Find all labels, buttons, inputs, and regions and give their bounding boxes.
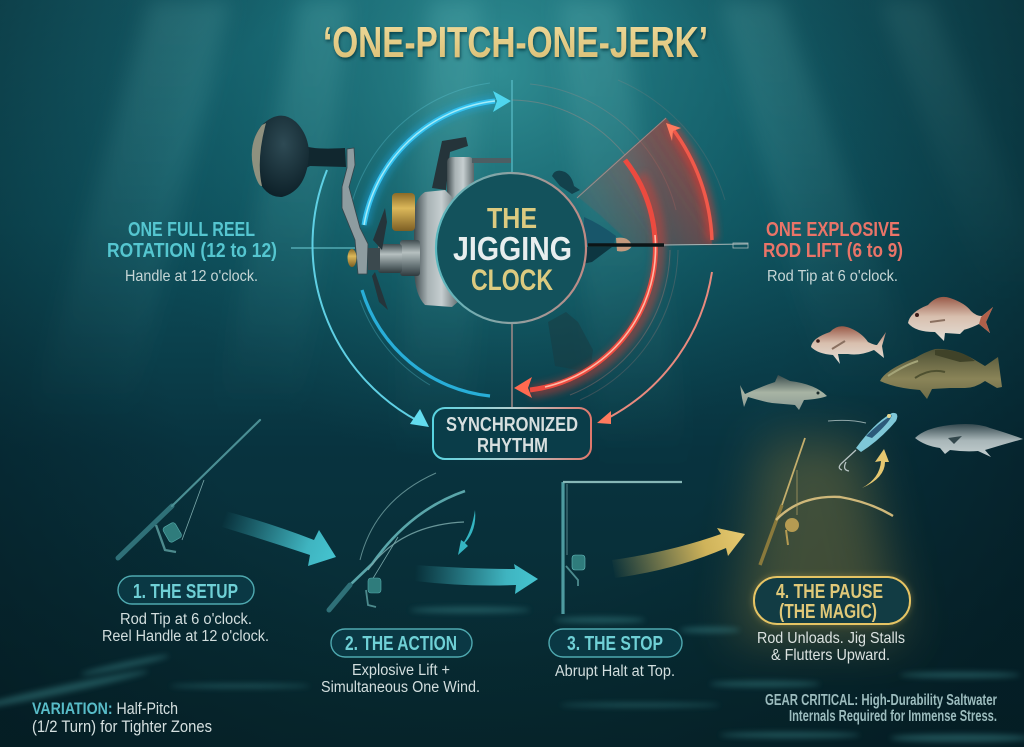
step 4 pill: 4. THE PAUSE: [776, 581, 883, 603]
step 1 description: [102, 611, 269, 645]
clock axis lines: [291, 80, 512, 408]
crank handle arm: [342, 148, 368, 274]
red sweep wedge: [577, 118, 712, 245]
step 4 description: Rod Unloads. Jig Stalls: [757, 630, 905, 647]
step 3 rod: [563, 482, 682, 614]
right label: rod lift: ROD LIFT (6 to 9): [763, 240, 903, 262]
teal arrow 1: [222, 511, 336, 566]
inner red arc with arrow: [514, 160, 660, 398]
fish: snapper 1: [811, 326, 886, 364]
step 2 pill: [331, 629, 472, 657]
step 3 pill: 3. THE STOP: [567, 633, 663, 655]
outer red arc with arrows: [597, 123, 712, 424]
step 4 description: [757, 630, 905, 664]
star drag fins: [372, 208, 388, 310]
fish: grouper: [880, 349, 1002, 399]
step 2 description: Simultaneous One Wind.: [321, 679, 480, 696]
gold flutter arrow: [862, 449, 889, 488]
knob cap: [252, 123, 266, 186]
clock label: THE: [487, 203, 537, 235]
brass nut: [392, 193, 415, 231]
right label: rod lift: [763, 219, 903, 285]
step 2 description: [321, 662, 480, 696]
step 4 pill: (THE MAGIC): [779, 601, 877, 623]
left label: reel rotation: ROTATION (12 to 12): [107, 240, 277, 262]
step 4 rod: [760, 438, 893, 565]
faint concentric rings: [350, 80, 725, 400]
angler rod: [588, 243, 748, 248]
variation note: (1/2 Turn) for Tighter Zones: [32, 717, 212, 736]
step 2 pill: 2. THE ACTION: [345, 633, 457, 655]
reel spindle: [368, 240, 420, 276]
small brass cap: [348, 249, 356, 267]
left label: reel rotation: Handle at 12 o'clock.: [125, 268, 258, 285]
jig lure: [828, 413, 897, 471]
variation note: [32, 699, 212, 736]
step 1 pill: 1. THE SETUP: [133, 581, 238, 603]
step 2 rod: [329, 473, 465, 610]
angler figure behind the clock: [548, 171, 632, 372]
outer blue arc with arrow: [313, 170, 429, 427]
step 4 pill: [754, 577, 910, 624]
reel illustration: [252, 116, 511, 310]
reel side plate: [414, 190, 460, 307]
knob neck: [298, 145, 346, 172]
fish school: [740, 297, 1023, 488]
inner blue arc with arrow: [362, 91, 511, 396]
synchronized rhythm box: RHYTHM: [477, 435, 548, 457]
clock label: JIGGING: [453, 230, 572, 267]
step 1 pill: [118, 576, 254, 604]
clock center circle: [436, 173, 586, 323]
step 3 description: Abrupt Halt at Top.: [555, 663, 675, 680]
gold arrow: [612, 528, 745, 578]
reel top frame: [432, 137, 468, 190]
step 1 description: Rod Tip at 6 o'clock.: [120, 611, 252, 628]
fish: amberjack: [740, 375, 827, 410]
step 1 description: Reel Handle at 12 o'clock.: [102, 628, 269, 645]
knob: [253, 116, 309, 197]
gear critical note: [765, 692, 997, 725]
teal curved arrow: [458, 510, 475, 555]
left label: reel rotation: ONE FULL REEL: [128, 219, 255, 241]
variation note: VARIATION: Half-Pitch: [32, 699, 178, 718]
right label: rod lift: Rod Tip at 6 o'clock.: [767, 268, 898, 285]
step 4 description: & Flutters Upward.: [771, 647, 890, 664]
fish: snapper 2: [908, 297, 993, 341]
step 2 description: Explosive Lift +: [352, 662, 450, 679]
step 3 pill: [549, 629, 682, 657]
synchronized rhythm box: SYNCHRONIZED: [446, 414, 578, 436]
clock label: CLOCK: [471, 264, 553, 297]
synchronized rhythm box: [433, 408, 591, 459]
title: ‘ONE-PITCH-ONE-JERK’: [323, 18, 708, 67]
step 1 rod: [118, 420, 260, 558]
fish: kingfish: [915, 424, 1023, 457]
wedge edge: [577, 118, 666, 198]
clock label: [453, 203, 572, 297]
right label: rod lift: ONE EXPLOSIVE: [766, 219, 900, 241]
teal arrow 2: [415, 564, 538, 594]
left label: reel rotation: [107, 219, 277, 285]
